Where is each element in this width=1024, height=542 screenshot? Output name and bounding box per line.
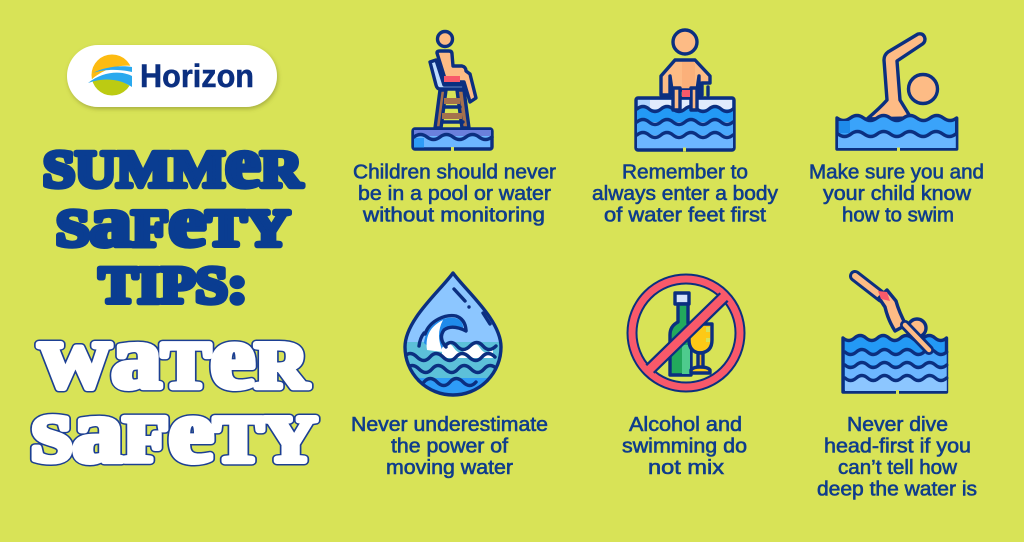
logo: Horizon — [67, 45, 277, 107]
logo: Horizon: Horizon — [140, 58, 254, 94]
text: tip 4: the power of — [391, 436, 508, 458]
text: tip 6: Never dive — [847, 414, 948, 436]
title: Water Safety outlined — [31, 308, 317, 481]
title: Summer Safety Tips: SUMMeR — [43, 122, 304, 202]
text: tip 4 — [351, 414, 548, 479]
title: Water Safety outlined: WaTeR — [38, 308, 309, 407]
text: tip 3 — [809, 162, 984, 226]
text: tip 6: deep the water is — [817, 478, 977, 500]
title: Water Safety outlined: WaTeR — [38, 308, 309, 407]
title: Summer Safety Tips: SaFeTY — [56, 182, 290, 262]
text: tip 2: Remember to — [622, 162, 748, 184]
icon: water drop with wave — [403, 271, 503, 397]
text: tip 2 — [592, 162, 778, 226]
icon: lifeguard chair — [413, 32, 492, 149]
text: tip 5: swimming do — [622, 436, 747, 458]
text: tip 3: Make sure you and — [809, 162, 984, 184]
text: tip 3: how to swim — [842, 204, 954, 226]
text: tip 4: Never underestimate — [351, 414, 548, 436]
text: tip 6 — [817, 414, 977, 500]
text: tip 5 — [622, 414, 747, 479]
icon: diver — [843, 276, 947, 392]
title: Water Safety outlined: SaFeTY — [31, 382, 317, 481]
text: tip 6: can’t tell how — [838, 457, 958, 479]
text: tip 6: head-first if you — [824, 436, 971, 458]
title: Water Safety outlined: SaFeTY — [31, 382, 317, 481]
text: tip 1 — [353, 162, 556, 226]
text: tip 5: Alcohol and — [629, 414, 742, 436]
text: tip 1: be in a pool or water — [358, 183, 551, 205]
text: tip 1: without monitoring — [362, 204, 545, 226]
title: Summer Safety Tips — [43, 122, 304, 314]
text: tip 2: of water feet first — [604, 204, 766, 226]
icon: person sitting at pool edge — [636, 30, 734, 150]
text: tip 5: not mix — [648, 457, 724, 479]
text: tip 3: your child know — [823, 183, 972, 205]
text: tip 2: always enter a body — [592, 183, 778, 205]
text: tip 4: moving water — [386, 457, 513, 479]
icon: swimmer — [837, 34, 957, 149]
text: tip 1: Children should never — [353, 162, 556, 184]
icon: no alcohol sign — [632, 279, 740, 387]
title: Summer Safety Tips: TIPS: — [99, 258, 247, 314]
